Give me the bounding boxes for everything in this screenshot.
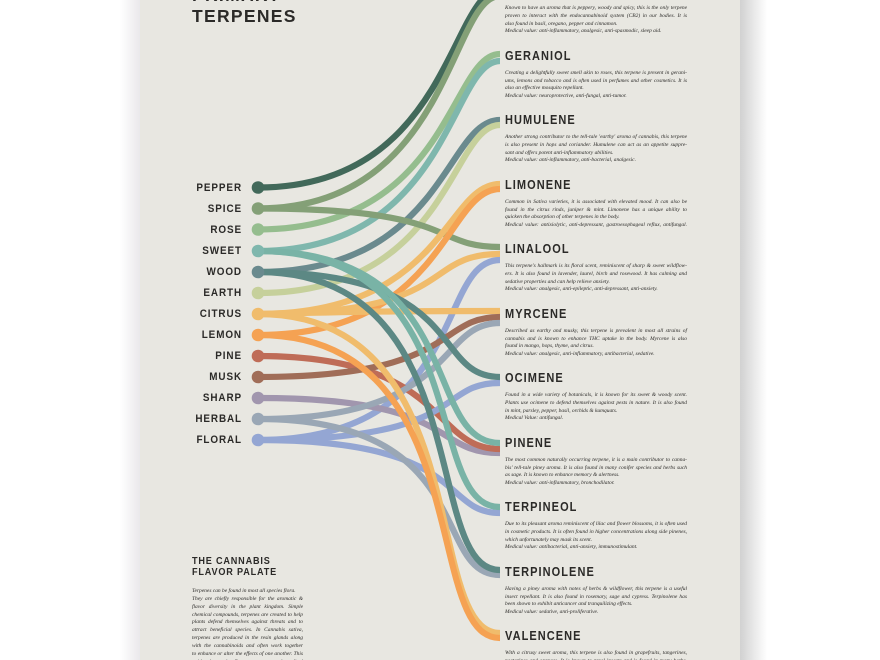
geraniol description <box>505 70 687 99</box>
humulene description <box>504 134 687 163</box>
flow: sweet to geraniol <box>258 61 500 251</box>
node dots <box>252 181 264 446</box>
title: TERPENES <box>192 6 297 26</box>
humulene description: Medical value: anti-inflammatory, anti-bacterial, analgesic. <box>505 157 636 163</box>
myrcene description: cannabis and is known to enhance THC uptake in the body. Myrcene is also <box>505 336 687 342</box>
limonene description: quicken the absorption of other terpenes in the body. <box>505 214 620 220</box>
aroma label: pepper: PEPPER <box>196 182 242 194</box>
aroma label: earth: EARTH <box>203 287 242 299</box>
myrcene description: Described as earthy and musky, this terpene is prevalent in most all strains of <box>505 328 687 334</box>
linalool description: ers. It is also found in lavender, laurel, birch and rosewood. It has calming and <box>505 271 687 277</box>
myrcene description: Medical value: analgesic, anti-inflammatory, antibacterial, sedative. <box>505 351 655 357</box>
ocimene description: Plants use ocimene to defend themselves against pests in nature. It is also found <box>505 400 687 406</box>
terpineol description: Medical value: antibacterial, anti-anxiety, immunostimulant. <box>505 544 637 550</box>
flow: musk to myrcene <box>258 317 500 377</box>
aroma label: pine: PINE <box>215 350 242 362</box>
heading: terpinolene: TERPINOLENE <box>505 564 595 578</box>
flow: wood to humulene <box>258 120 500 272</box>
flow: herbal to terpinolene <box>258 419 500 575</box>
flow: sweet to terpineol <box>258 251 500 507</box>
limonene description: found in the citrus rinds, juniper & mint. Limonene has a unique ability to <box>505 206 687 212</box>
limonene description: Medical value: antixiolytic, anti-depressant, gastroesophageal reflux, antifungal. <box>505 222 687 228</box>
flow: floral to ocimene <box>258 383 500 440</box>
aroma label: sweet: SWEET <box>202 245 242 257</box>
heading: ocimene: OCIMENE <box>505 371 564 385</box>
sidebar heading: FLAVOR PALATE <box>192 567 277 578</box>
humulene description: is also present in hops and coriander. Humulene can act as an appetite suppre- <box>505 142 687 148</box>
valencene description <box>505 650 687 660</box>
terpineol description: Due to its pleasant aroma reminiscent of lilac and flower blossoms, it is often used <box>505 521 687 527</box>
terpinolene description: Having a piney aroma with notes of herbs & wildflower, this terpene is a useful <box>505 586 687 592</box>
limonene description: Common in Sativa varieties, it is associated with elevated mood. It can also be <box>505 199 687 205</box>
sidebar intro text: to enhance or alter the effects of one another. This <box>192 651 303 657</box>
heading: geraniol: GERANIOL <box>505 48 572 62</box>
aroma label: spice: SPICE <box>208 203 242 215</box>
sidebar intro text <box>192 588 303 660</box>
flow: wood to terpinolene <box>258 272 500 570</box>
aroma label: floral: FLORAL <box>196 434 242 446</box>
flow: lemon to limonene <box>258 189 500 335</box>
flow: citrus to limonene <box>258 184 500 314</box>
flow: pepper to caryophyllene <box>258 0 500 188</box>
geraniol description: also an effective mosquito repellant. <box>505 85 584 91</box>
flow: spice to caryophyllene <box>258 0 500 208</box>
flow: citrus to linalool <box>258 254 500 314</box>
terpinolene description: been shown to exhibit anticancer and tranquilizing effects. <box>505 601 632 607</box>
caryophyllene description: proven to interact with the endocannabinoid system (CB2) in our bodies. It is <box>505 13 687 19</box>
caryophyllene description: also found in basil, oregano, pepper and cinnamon. <box>505 21 617 27</box>
ocimene description: Medical Value: antifungal. <box>505 415 563 421</box>
flow: citrus to valencene <box>258 314 500 633</box>
flow: wood to ocimene <box>258 272 500 377</box>
heading: valencene: VALENCENE <box>505 629 582 643</box>
flow: floral to linalool <box>258 260 500 440</box>
terpineol description: in cosmetic products. It is often found in higher concentrations along side pinenes, <box>505 529 687 535</box>
terpinolene description <box>505 586 687 615</box>
linalool description: This terpene's hallmark is its floral scent, reminiscent of sharp & sweet wildflow- <box>505 263 687 269</box>
heading: linalool: LINALOOL <box>505 242 570 256</box>
flow: lemon to valencene <box>258 335 500 638</box>
humulene description: Another strong contributor to the tell-tale 'earthy' aroma of cannabis, this terpene <box>505 134 687 140</box>
myrcene description: found in mango, hops, thyme, and citrus. <box>505 343 594 349</box>
aroma label: lemon: LEMON <box>202 329 242 341</box>
linalool description: Medical value: analgesic, anti-epileptic, anti-depressant, anti-anxiety. <box>505 286 658 292</box>
aroma label: wood: WOOD <box>206 266 242 278</box>
heading: myrcene: MYRCENE <box>505 306 567 320</box>
terpinolene description: insect repellant. It is also found in rosemary, sage and cypress. Terpinolene has <box>505 594 687 600</box>
flow: citrus to myrcene <box>258 311 500 314</box>
valencene description: With a citrusy sweet aroma, this terpene is also found in grapefruits, tangerines, <box>505 650 687 656</box>
heading: terpineol: TERPINEOL <box>505 500 577 514</box>
linalool description: sedative properties and can help relieve anxiety. <box>505 279 610 285</box>
sidebar intro text: They are chiefly responsible for the aromatic & <box>192 596 303 602</box>
sidebar intro text: flavor diversity in the plant kingdom. Simple <box>192 604 303 610</box>
heading: limonene: LIMONENE <box>505 178 572 192</box>
geraniol description: Creating a delightfully sweet smell akin to roses, this terpene is present in gerani- <box>505 70 687 76</box>
caryophyllene description: Known to have an aroma that is peppery, woody and spicy, this is the only terpene <box>505 5 687 11</box>
aroma label: sharp: SHARP <box>203 392 242 404</box>
ocimene description: Found in a wide variety of botanicals, it is known for its sweet & woody scent. <box>505 392 687 398</box>
terpinolene description: Medical value: sedative, anti-proliferative. <box>505 609 598 615</box>
linalool description <box>505 263 687 292</box>
flow: herbal to myrcene <box>258 323 500 419</box>
sidebar intro text: attract beneficial species. In Cannabis sativa, <box>192 627 303 633</box>
flow: floral to terpineol <box>258 440 500 513</box>
heading: humulene: HUMULENE <box>505 113 576 127</box>
terpineol description <box>505 521 687 550</box>
sidebar intro text: chemical compounds, terpenes are created to help <box>192 612 303 618</box>
aroma label: rose: ROSE <box>210 224 242 236</box>
pinene description: bis' tell-tale piney aroma. It is also found in many conifer species and herbs such <box>505 464 687 470</box>
sidebar intro text: Terpenes can be found in most all species flora. <box>192 588 296 594</box>
flow: spice to linalool <box>258 208 500 247</box>
sidebar intro text: plants defend themselves against threats and to <box>192 619 303 625</box>
ocimene description: in mint, parsley, pepper, basil, orchids & kumquats. <box>505 408 617 414</box>
geraniol description: Medical value: neuroprotective, anti-fungal, anti-tumor. <box>505 93 627 99</box>
aroma label: citrus: CITRUS <box>200 308 242 320</box>
sidebar intro text: terpenes are produced in the resin glands along <box>192 635 303 641</box>
sidebar heading <box>192 556 277 578</box>
heading: pinene: PINENE <box>505 436 552 450</box>
humulene description: sant and offers potent anti-inflammatory abilities. <box>505 150 613 156</box>
myrcene description <box>505 328 688 357</box>
flow: rose to geraniol <box>258 54 500 230</box>
terpineol description: which unfortunately may mask its scent. <box>505 537 592 543</box>
limonene description <box>505 199 687 228</box>
pinene description: The most common naturally occurring terpene, it is a main contributor to canna- <box>505 457 687 463</box>
ocimene description <box>505 392 687 421</box>
pinene description: as sage. It is known to enhance memory & alertness. <box>505 472 620 478</box>
sidebar heading: THE CANNABIS <box>192 556 271 566</box>
poster panel <box>140 0 740 660</box>
geraniol description: ums, lemons and tobacco and is often used in perfumes and other cosmetics. It is <box>505 78 687 84</box>
aroma label: herbal: HERBAL <box>195 413 242 425</box>
aroma label: musk: MUSK <box>209 371 242 383</box>
flow: sweet to pinene <box>258 251 500 443</box>
pinene description: Medical value: anti-inflammatory, bronchodilator. <box>505 480 615 486</box>
sidebar intro text: with the cannabinoids and often work together <box>192 643 303 649</box>
flow: earth to humulene <box>258 125 500 293</box>
flow: pine to pinene <box>258 356 500 449</box>
caryophyllene description <box>504 5 687 34</box>
flow: sharp to pinene <box>258 398 500 453</box>
pinene description <box>505 457 687 486</box>
caryophyllene description: Medical value: anti-inflammatory, analgesic, anti-spasmodic, sleep aid. <box>505 28 661 34</box>
